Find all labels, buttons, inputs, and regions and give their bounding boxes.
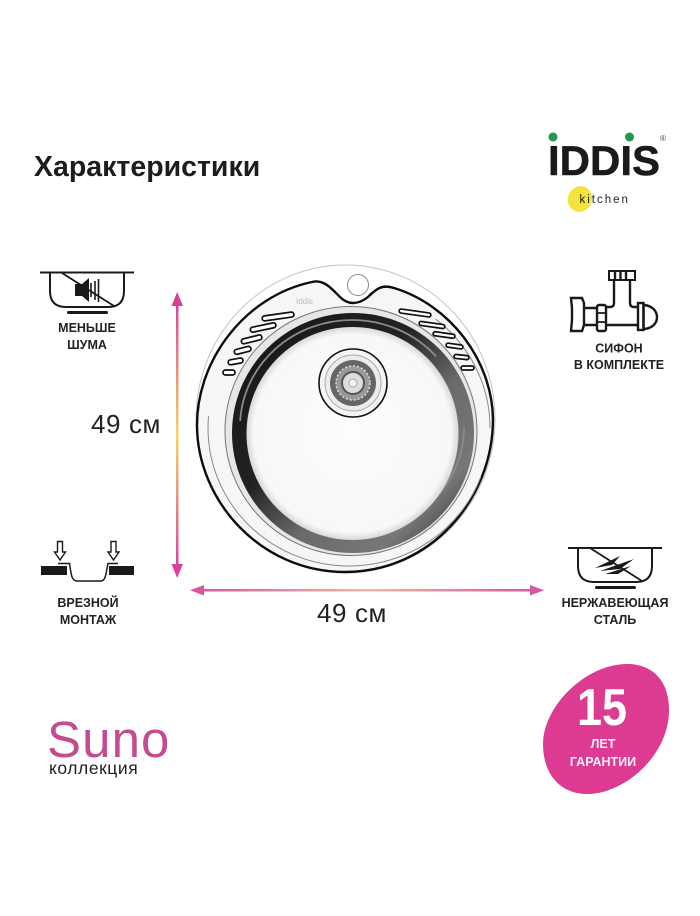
logo kitchen label: kitchen <box>580 194 630 206</box>
faucet hole <box>348 274 368 296</box>
label: stainless steel: СТАЛЬ <box>594 613 636 627</box>
bowl floor <box>246 327 458 540</box>
drain <box>319 349 387 417</box>
sink rim <box>196 265 495 573</box>
sink rim line with faucet notch <box>197 281 493 572</box>
bowl wall <box>225 306 477 556</box>
icon: less noise <box>40 272 134 314</box>
logo wordmark: IDDIS <box>548 137 660 184</box>
badge shape <box>543 664 669 794</box>
collection name: Suno <box>47 711 171 768</box>
icon: flush mount <box>41 542 134 581</box>
title: Характеристики <box>34 151 260 183</box>
label: flush mount: ВРЕЗНОЙ <box>57 595 119 610</box>
badge number: 15 <box>577 679 627 737</box>
horizontal dimension arrow <box>190 585 544 596</box>
collection caption: коллекция <box>49 758 138 778</box>
warranty badge <box>543 664 669 794</box>
drain ribs right <box>399 309 474 370</box>
icon: siphon <box>571 271 657 331</box>
icon: stainless steel <box>568 548 662 589</box>
label: less noise: ШУМА <box>67 338 107 352</box>
small brand mark: Iddis <box>296 297 313 306</box>
label: siphon included: СИФОН <box>595 342 643 356</box>
logo registered mark: ® <box>660 134 666 143</box>
label: flush mount: МОНТАЖ <box>60 613 117 627</box>
logo: IDDIS kitchen <box>548 132 666 215</box>
vertical dimension arrow <box>172 292 183 578</box>
logo yellow blob <box>564 183 596 215</box>
logo green dots <box>548 132 634 142</box>
label: siphon included: В КОМПЛЕКТЕ <box>574 358 664 372</box>
badge text: ГАРАНТИИ <box>570 755 636 769</box>
sink inner rim line <box>208 290 490 566</box>
label: stainless steel: НЕРЖАВЕЮЩАЯ <box>562 596 668 610</box>
label: less noise: МЕНЬШЕ <box>58 321 116 335</box>
width label: 49 см <box>317 598 387 628</box>
drain ribs left <box>223 312 294 375</box>
sink illustration <box>196 265 495 573</box>
height label: 49 см <box>91 409 161 439</box>
badge text: ЛЕТ <box>591 737 616 751</box>
